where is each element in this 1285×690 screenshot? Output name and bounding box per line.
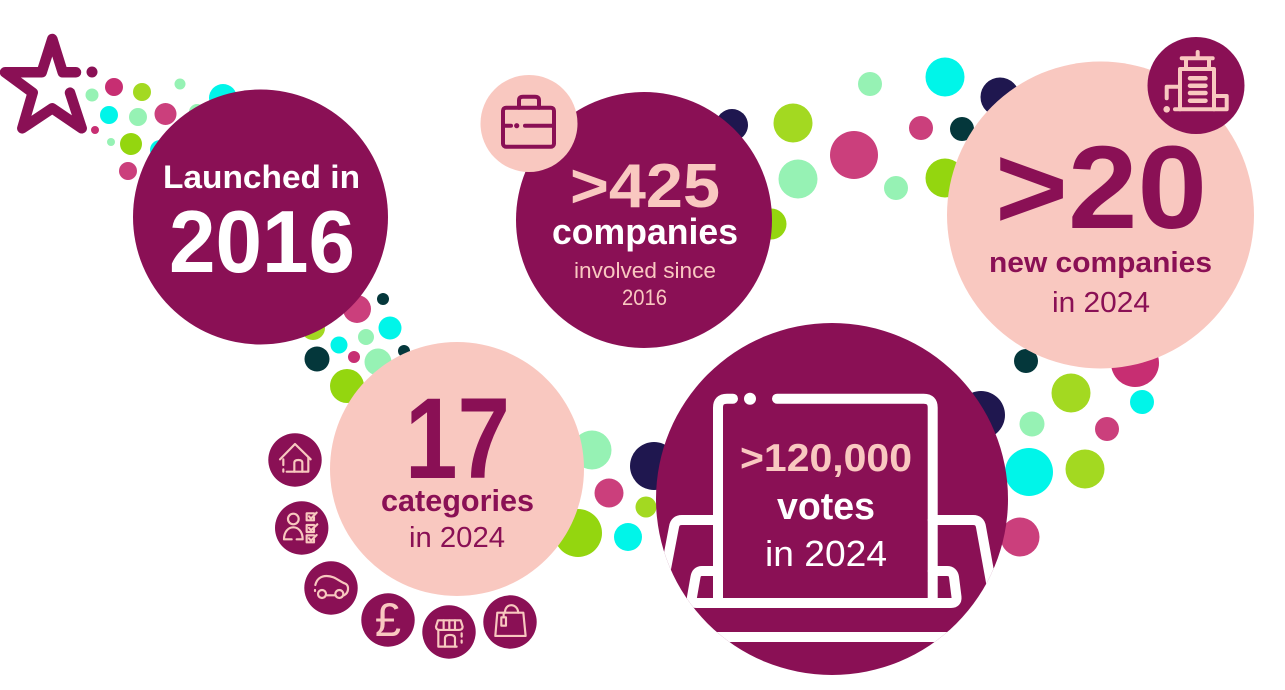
icon: briefcase xyxy=(480,75,578,172)
icon: office building xyxy=(1148,37,1244,134)
panel: new companies xyxy=(947,62,1254,368)
number: >425: >425 xyxy=(570,152,720,221)
icon: person with checklist xyxy=(275,501,328,555)
dots: between categories and votes xyxy=(554,430,678,557)
panel: companies involved xyxy=(516,92,772,348)
label: companies: companies xyxy=(552,211,738,252)
text: in 2024: in 2024 xyxy=(765,533,887,574)
dots: between launch and categories xyxy=(301,293,410,403)
dots: star trail xyxy=(86,66,237,180)
icon: shopping bag xyxy=(483,595,537,649)
text: 2016: 2016 xyxy=(622,285,667,310)
star icon xyxy=(5,39,82,128)
text: in 2024: in 2024 xyxy=(409,522,505,554)
dots: between new companies and votes xyxy=(957,339,1159,556)
text: involved since: involved since xyxy=(574,258,716,283)
icon: car xyxy=(304,561,358,615)
label: votes: votes xyxy=(777,486,875,528)
label: categories: categories xyxy=(381,483,534,518)
icon: pound sign: £ xyxy=(375,593,401,646)
number: 2016: 2016 xyxy=(169,192,355,291)
panel: categories xyxy=(330,342,584,596)
icon: pound sign xyxy=(361,593,415,647)
panel: votes xyxy=(656,323,1008,675)
number: >20: >20 xyxy=(995,122,1207,254)
dots: between companies and new companies xyxy=(716,58,1020,240)
label: new companies: new companies xyxy=(989,247,1212,279)
number: 17: 17 xyxy=(405,375,510,503)
icon: shop xyxy=(422,605,476,659)
number: >120,000: >120,000 xyxy=(740,437,912,480)
icon: house xyxy=(268,433,322,487)
heading: launched in: Launched in xyxy=(163,159,360,195)
icon: laptop xyxy=(660,393,996,637)
text: in 2024: in 2024 xyxy=(1052,287,1150,319)
panel: launched in 2016 xyxy=(133,90,388,344)
